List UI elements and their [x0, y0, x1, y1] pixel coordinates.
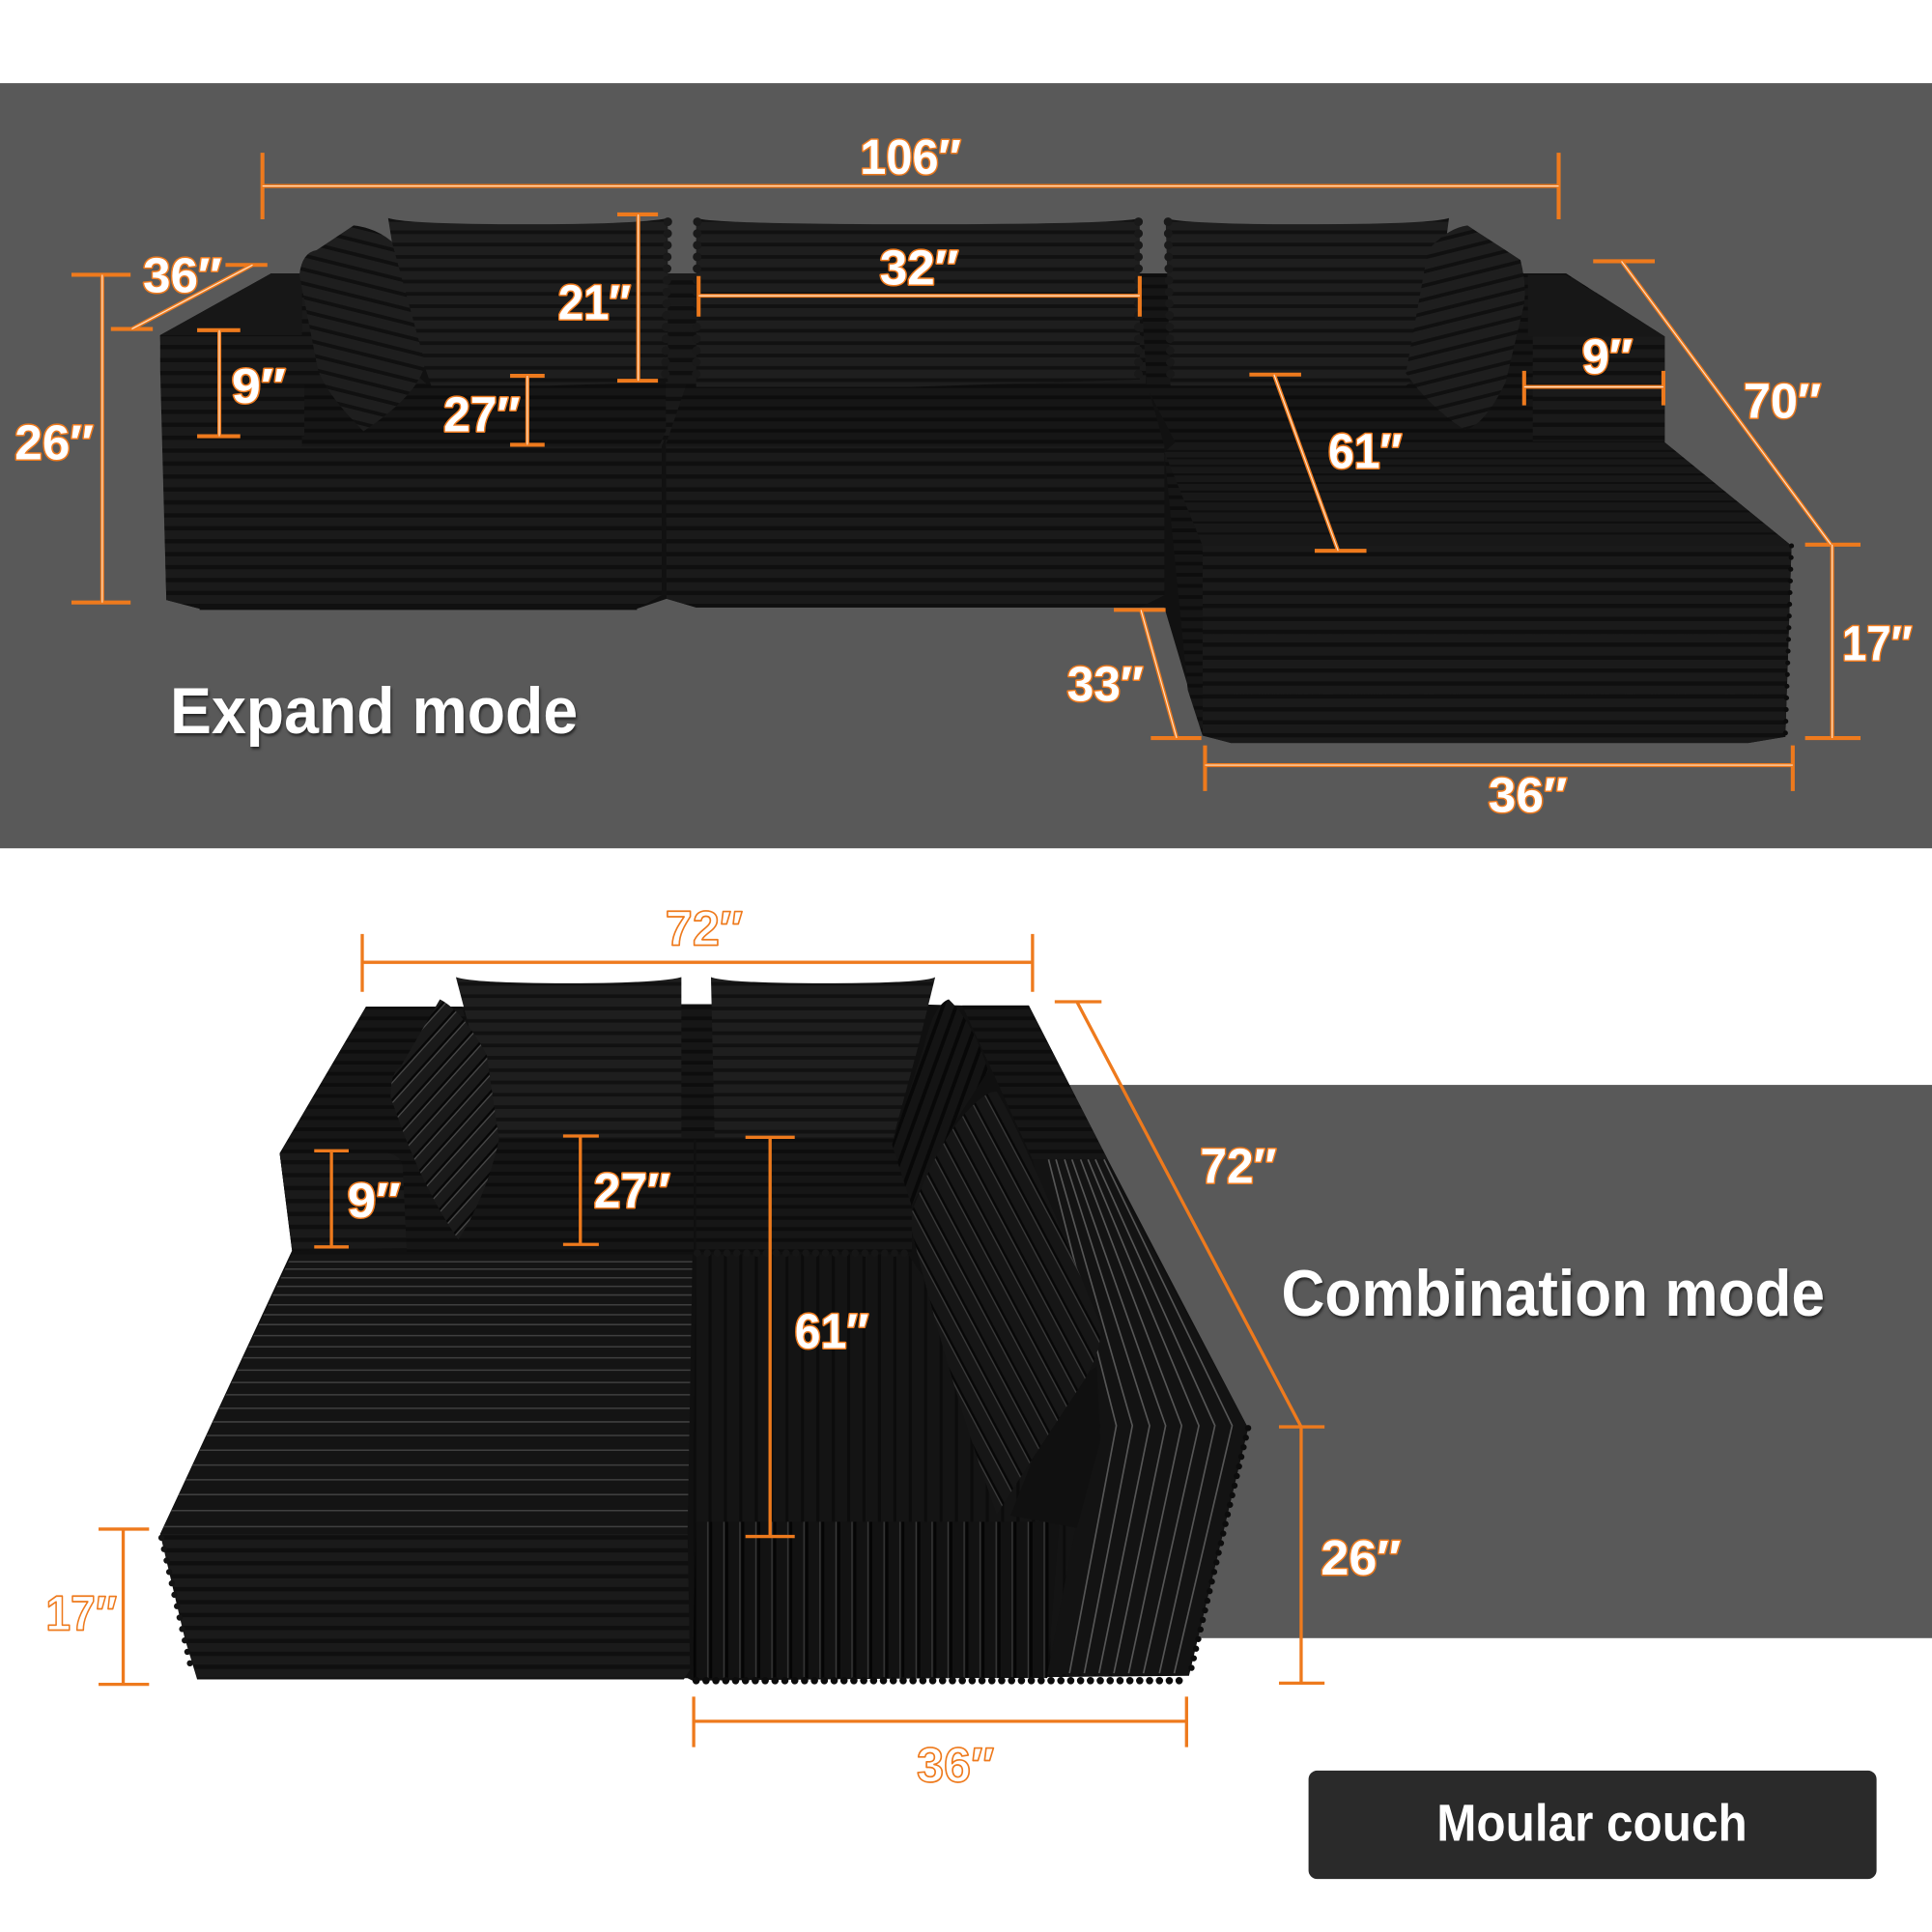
dimension: 33 inch chaise offset: 33″: [1067, 657, 1144, 712]
dimension: 36 inch chaise width: 36″: [1489, 768, 1567, 823]
dimension: 72 inch diagonal depth: [1055, 1002, 1324, 1427]
dimension: 36 inch arm depth: 36″: [143, 247, 222, 302]
dimension: 9 inch arm height: 9″: [348, 1173, 401, 1228]
center module: [666, 273, 1164, 608]
heading: expand mode: Expand mode: [170, 675, 578, 748]
dimension: 21 inch pillow height: 21″: [558, 274, 631, 329]
dimension: 26 inch height: 26″: [14, 415, 94, 470]
side pillow right: [1406, 225, 1525, 430]
dimension: 26 inch height: [1279, 1427, 1401, 1683]
dimension: 106 inch width: [263, 129, 1559, 219]
dimension: 17 inch seat height: [1805, 545, 1913, 738]
dimension: 32 inch pillow width: 32″: [880, 241, 958, 296]
dimension: 9 inch arm width: 9″: [1582, 328, 1633, 384]
rear seat module: [407, 1005, 912, 1252]
dimension: 70 inch depth: 70″: [1744, 373, 1821, 428]
dimension: 27 inch seat depth: [563, 1136, 670, 1244]
dimension: 70 inch depth: [1593, 261, 1861, 545]
dimension: 72 inch diagonal depth: 72″: [1200, 1138, 1276, 1193]
back pillow left: [388, 218, 668, 385]
dimension: 27 inch seat depth: 27″: [443, 386, 520, 441]
dimension: 27 inch seat depth: 27″: [594, 1163, 670, 1218]
inner arm shadow: [1010, 1367, 1100, 1528]
product label button: Moular couch: [1436, 1796, 1747, 1853]
right module and chaise: [1140, 273, 1799, 743]
panel: combination mode band: [1060, 1085, 1932, 1638]
dimension: 36 inch chaise width: [1205, 746, 1793, 823]
panel: expand mode band: [0, 83, 1932, 848]
dimension: 26 inch height: 26″: [1321, 1530, 1401, 1585]
dimension: 26 inch height: [14, 274, 130, 603]
dimension: 72 inch back width: 72″: [666, 900, 743, 955]
dimension: 32 inch pillow width: [698, 241, 1140, 317]
dimension: 61 inch chaise depth: 61″: [1328, 424, 1403, 479]
sofa: combination mode: [124, 977, 1248, 1688]
dimension: 36 inch arm depth: [111, 247, 268, 329]
product label button: [1309, 1771, 1877, 1879]
back pillow right: [711, 977, 935, 1137]
dimension: 33 inch chaise offset: [1067, 610, 1202, 738]
dimension: 106 inch width: 106″: [860, 129, 961, 185]
side pillow left: [299, 225, 425, 431]
chaise module: [124, 1254, 702, 1680]
side pillow left: [390, 999, 499, 1239]
dimension: 9 inch arm height: [197, 330, 286, 437]
dimension: 21 inch pillow height: [558, 214, 658, 381]
silhouette: [160, 273, 1792, 743]
left module: [160, 273, 686, 610]
dimension: 9 inch arm height: [314, 1151, 401, 1247]
back pillow right: [1166, 218, 1449, 385]
right module seat: [690, 1253, 1182, 1688]
back pillow center: [696, 218, 1140, 387]
back pillow left: [456, 977, 681, 1137]
dimension: 36 inch width: [694, 1696, 1186, 1792]
right arm ribs: [1033, 1159, 1248, 1674]
dimension: 27 inch seat depth: [443, 376, 545, 444]
dimension: 61 inch chaise depth: [1249, 375, 1403, 551]
rear side pillow right: [892, 999, 988, 1207]
dimension: 36 inch width: 36″: [917, 1737, 994, 1792]
front side pillow right: [912, 1092, 1100, 1515]
dimension: 9 inch arm height: 9″: [232, 358, 286, 413]
dimension: 61 inch depth: [746, 1137, 868, 1537]
left arm: [280, 1007, 499, 1251]
dimension: 17 inch seat height: [45, 1529, 149, 1685]
dimension: 9 inch arm width: [1524, 328, 1663, 406]
silhouette: [160, 1005, 1248, 1681]
dimension: 17 inch seat height: 17″: [1842, 616, 1913, 671]
dimension: 61 inch depth: 61″: [795, 1303, 868, 1358]
sofa: expand mode: [160, 218, 1799, 743]
dimension: 17 inch seat height: 17″: [45, 1585, 117, 1640]
right arm top: [962, 1006, 1108, 1159]
heading: combination mode: Combination mode: [1282, 1258, 1825, 1330]
dimension: 72 inch back width: [362, 900, 1033, 992]
